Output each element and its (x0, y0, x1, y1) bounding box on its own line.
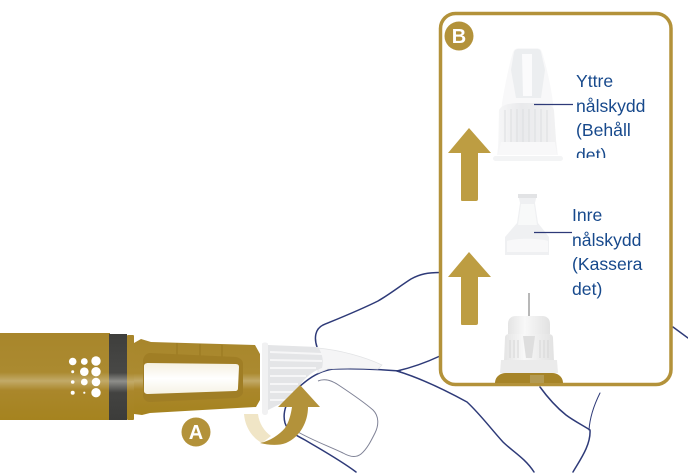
needle (528, 293, 530, 316)
white dot logo (69, 356, 101, 397)
label: outer needle shield: nålskydd (576, 96, 645, 116)
label: inner needle shield: det) (572, 278, 602, 298)
outer needle shield (493, 48, 563, 161)
front section (134, 339, 260, 415)
badge A (182, 418, 210, 446)
needle cap on pen (262, 342, 382, 415)
needle hub (495, 293, 563, 383)
badge B: B (452, 26, 466, 48)
label: outer needle shield (576, 71, 645, 158)
arrow tail (244, 414, 271, 443)
leader line outer shield (534, 104, 573, 106)
inner needle shield (505, 194, 549, 255)
up arrow lower (448, 252, 491, 325)
panel B (440, 14, 671, 384)
up arrow upper (448, 128, 491, 201)
label: outer needle shield: (Behåll (576, 120, 631, 140)
badge B (444, 22, 474, 50)
label: inner needle shield (572, 205, 642, 298)
collar (127, 335, 134, 420)
leader line inner shield (534, 232, 572, 234)
window (144, 363, 239, 394)
dark band (109, 334, 127, 420)
pen body (0, 333, 110, 420)
label: inner needle shield: nålskydd (572, 230, 641, 250)
label: inner needle shield: (Kassera (572, 254, 642, 274)
rotate arrow (244, 385, 320, 445)
label: inner needle shield: Inre (572, 205, 602, 225)
label: outer needle shield: Yttre (576, 71, 613, 91)
gold hub base (495, 373, 563, 383)
arrow head and shaft (260, 385, 320, 445)
badge A: A (189, 422, 203, 444)
pen (0, 333, 260, 420)
hand outline (284, 272, 688, 472)
thumbnail outline (298, 380, 378, 457)
